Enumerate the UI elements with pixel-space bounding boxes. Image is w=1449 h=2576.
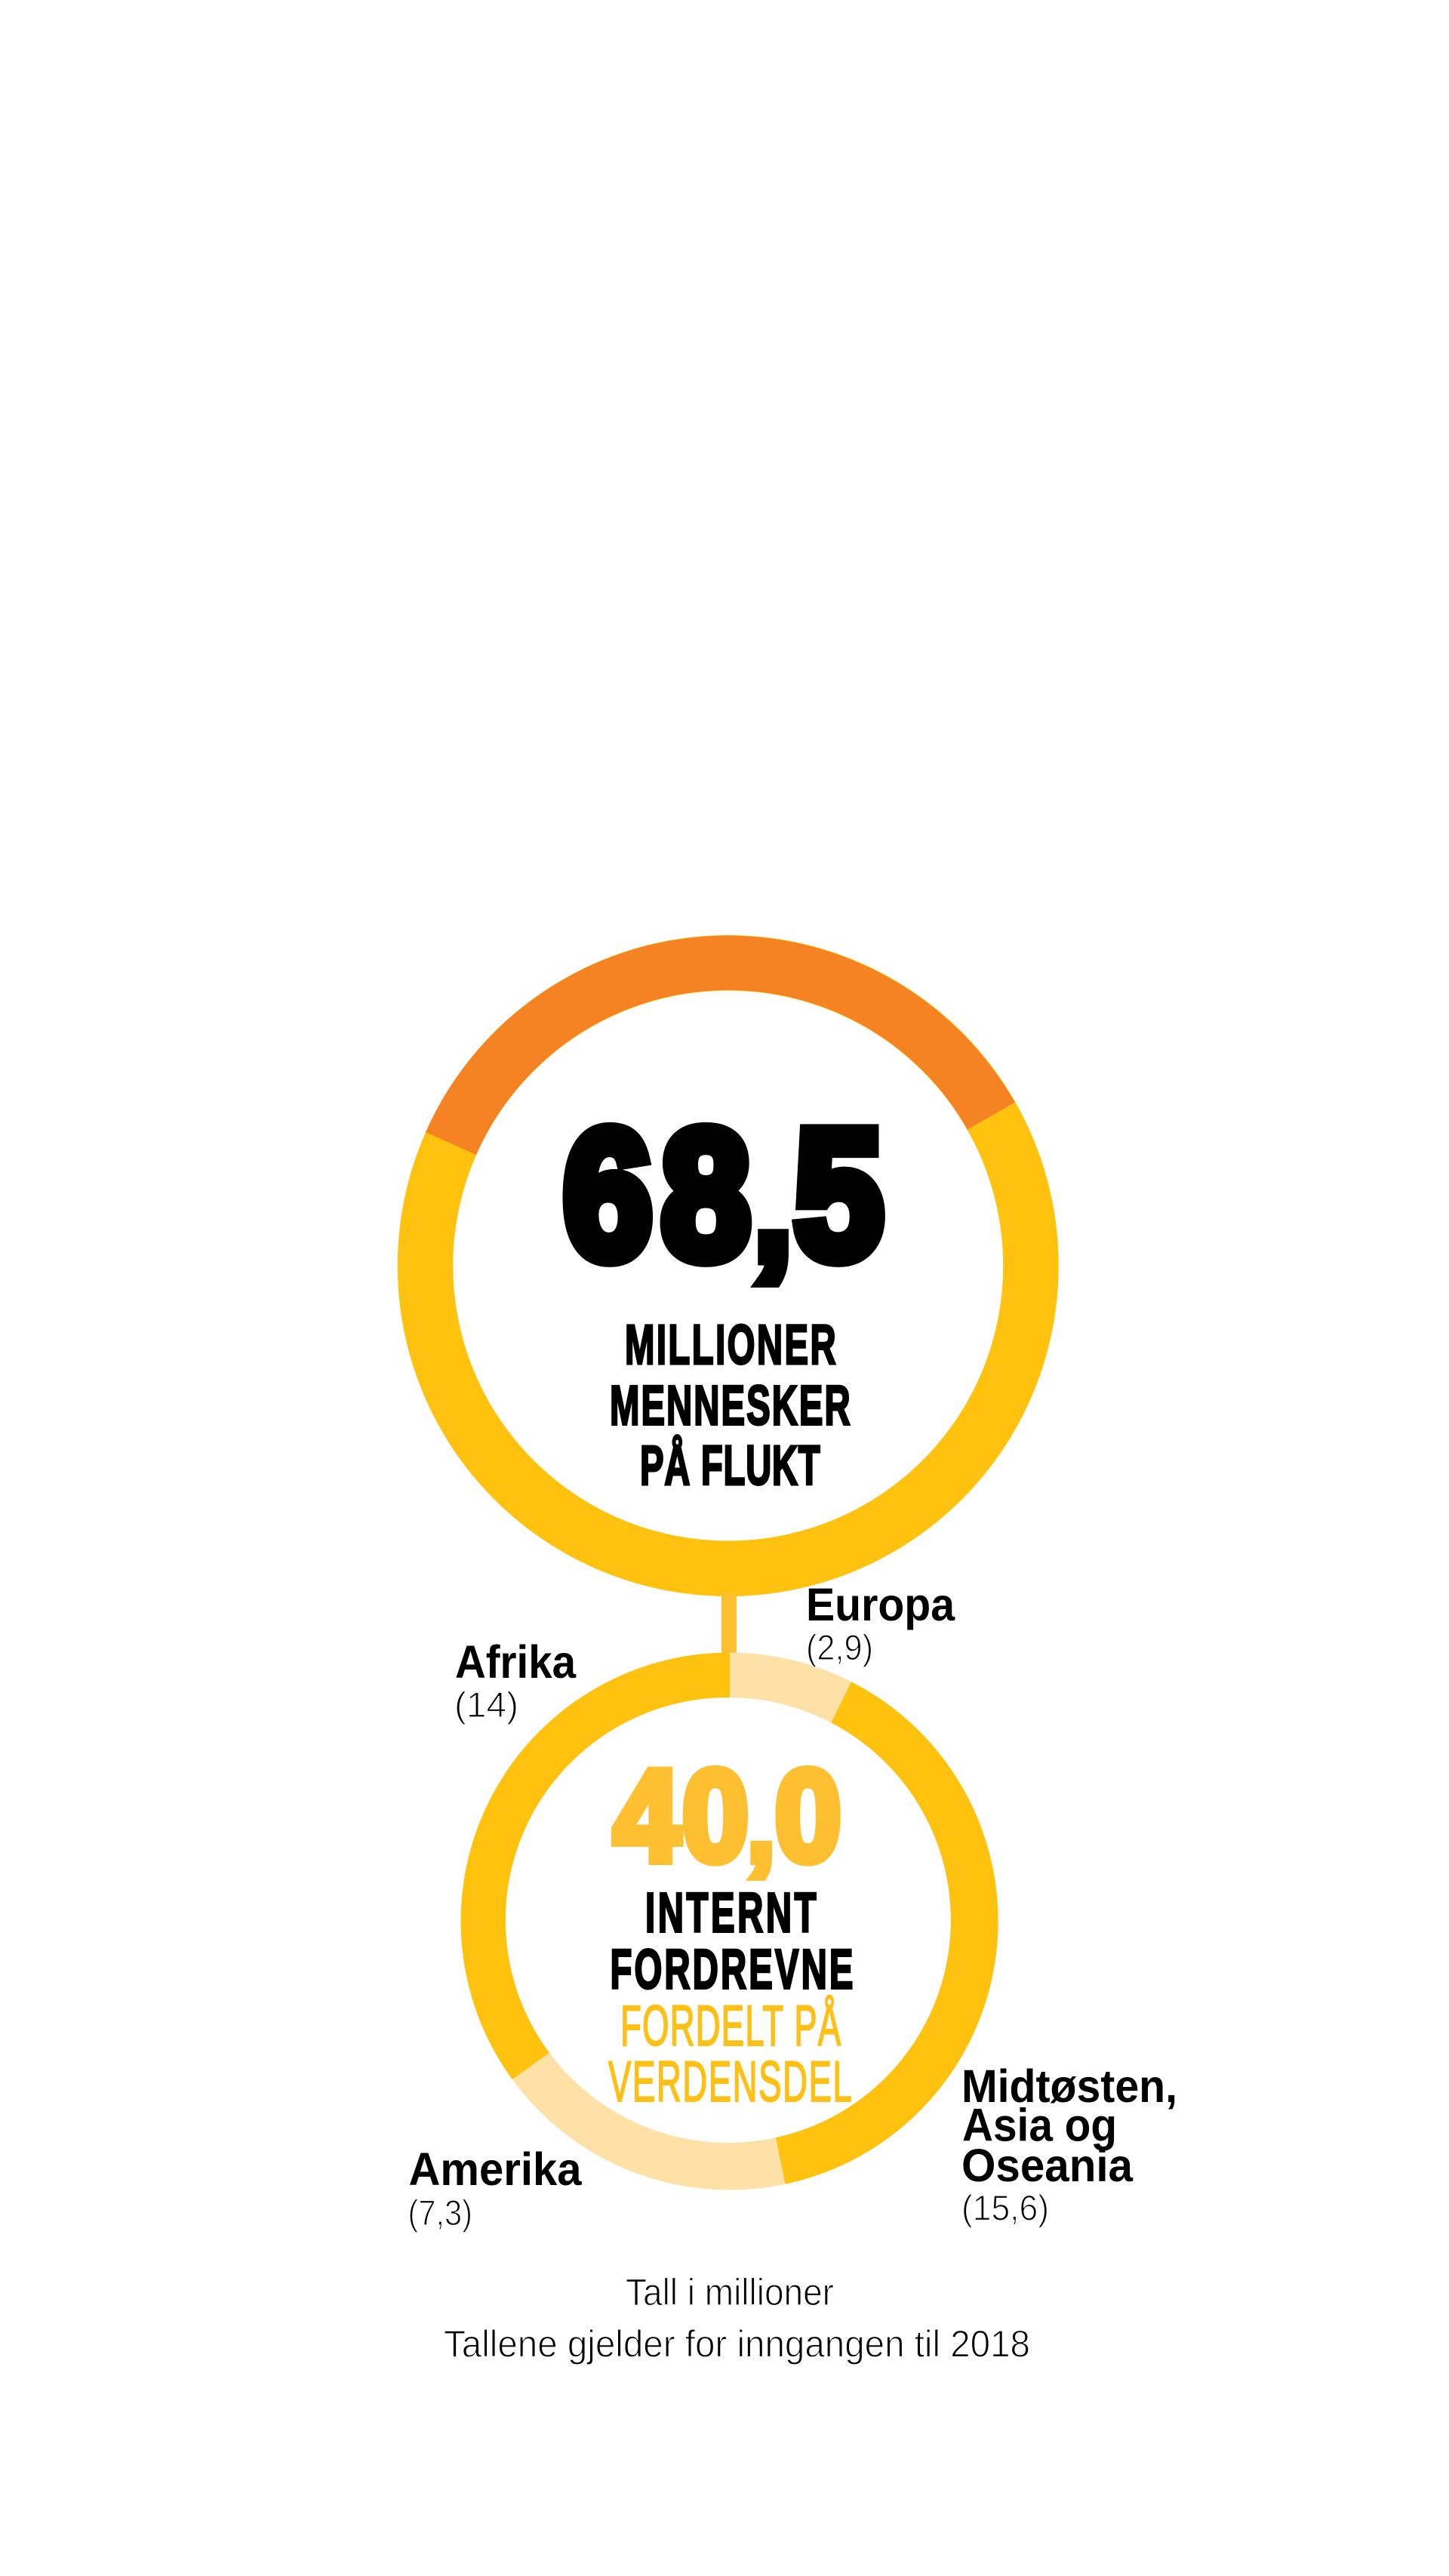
label: Midtøsten, Asia og Oseania: Midtøsten, <box>961 2060 1177 2112</box>
subheading: fordelt på verdensdel: VERDENSDEL <box>608 2050 852 2114</box>
ring: internally displaced by region <box>461 1652 998 2190</box>
panel: total displaced <box>398 935 1059 1596</box>
label: Midtøsten, Asia og Oseania: Asia og <box>962 2100 1117 2151</box>
ring: total 68.5 million <box>398 935 1059 1596</box>
ring segment: orange <box>426 936 1015 1155</box>
connector line between rings <box>721 1593 737 1656</box>
ring segment: Europa <box>730 1653 851 1722</box>
label: Midtøsten, Asia og Oseania: (15,6) <box>961 2188 1049 2228</box>
ring segment: Midtøsten, Asia og Oseania <box>776 1682 998 2184</box>
heading: millioner mennesker på flukt: MILLIONER <box>625 1314 836 1377</box>
footnote: Tall i millioner <box>626 2271 834 2313</box>
label: Midtøsten, Asia og Oseania: Oseania <box>961 2140 1134 2191</box>
subheading: fordelt på verdensdel <box>608 1994 852 2114</box>
ring segment: Amerika <box>512 2053 785 2190</box>
label: Amerika: (7,3) <box>408 2193 472 2233</box>
big number 68,5: 68,5 <box>563 1093 883 1297</box>
panel: internally displaced <box>408 1579 1177 2233</box>
heading: millioner mennesker på flukt: PÅ FLUKT <box>640 1434 820 1497</box>
label: Afrika <box>454 1636 577 1725</box>
footnote: Tallene gjelder for inngangen til 2018 <box>444 2323 1030 2365</box>
label: Midtøsten, Asia og Oseania <box>961 2060 1177 2228</box>
heading: millioner mennesker på flukt: MENNESKER <box>610 1375 851 1437</box>
label: Europa: (2,9) <box>806 1627 873 1667</box>
label: Europa <box>806 1579 955 1667</box>
ring segment: yellow base <box>398 935 1059 1596</box>
label: Afrika: (14) <box>454 1685 518 1725</box>
label: Afrika: Afrika <box>455 1636 577 1688</box>
subheading: fordelt på verdensdel: FORDELT PÅ <box>620 1994 841 2058</box>
big number 40,0: 40,0 <box>614 1743 841 1888</box>
heading: millioner mennesker på flukt <box>610 1314 851 1497</box>
footnote <box>444 2271 1030 2365</box>
label: Amerika: Amerika <box>409 2144 583 2195</box>
heading: internt fordrevne: FORDREVNE <box>611 1939 853 2001</box>
heading: internt fordrevne: INTERNT <box>645 1882 817 1944</box>
ring segment: Afrika <box>461 1652 730 2079</box>
label: Europa: Europa <box>806 1579 955 1630</box>
heading: internt fordrevne <box>611 1882 853 2001</box>
label: Amerika <box>408 2144 583 2233</box>
